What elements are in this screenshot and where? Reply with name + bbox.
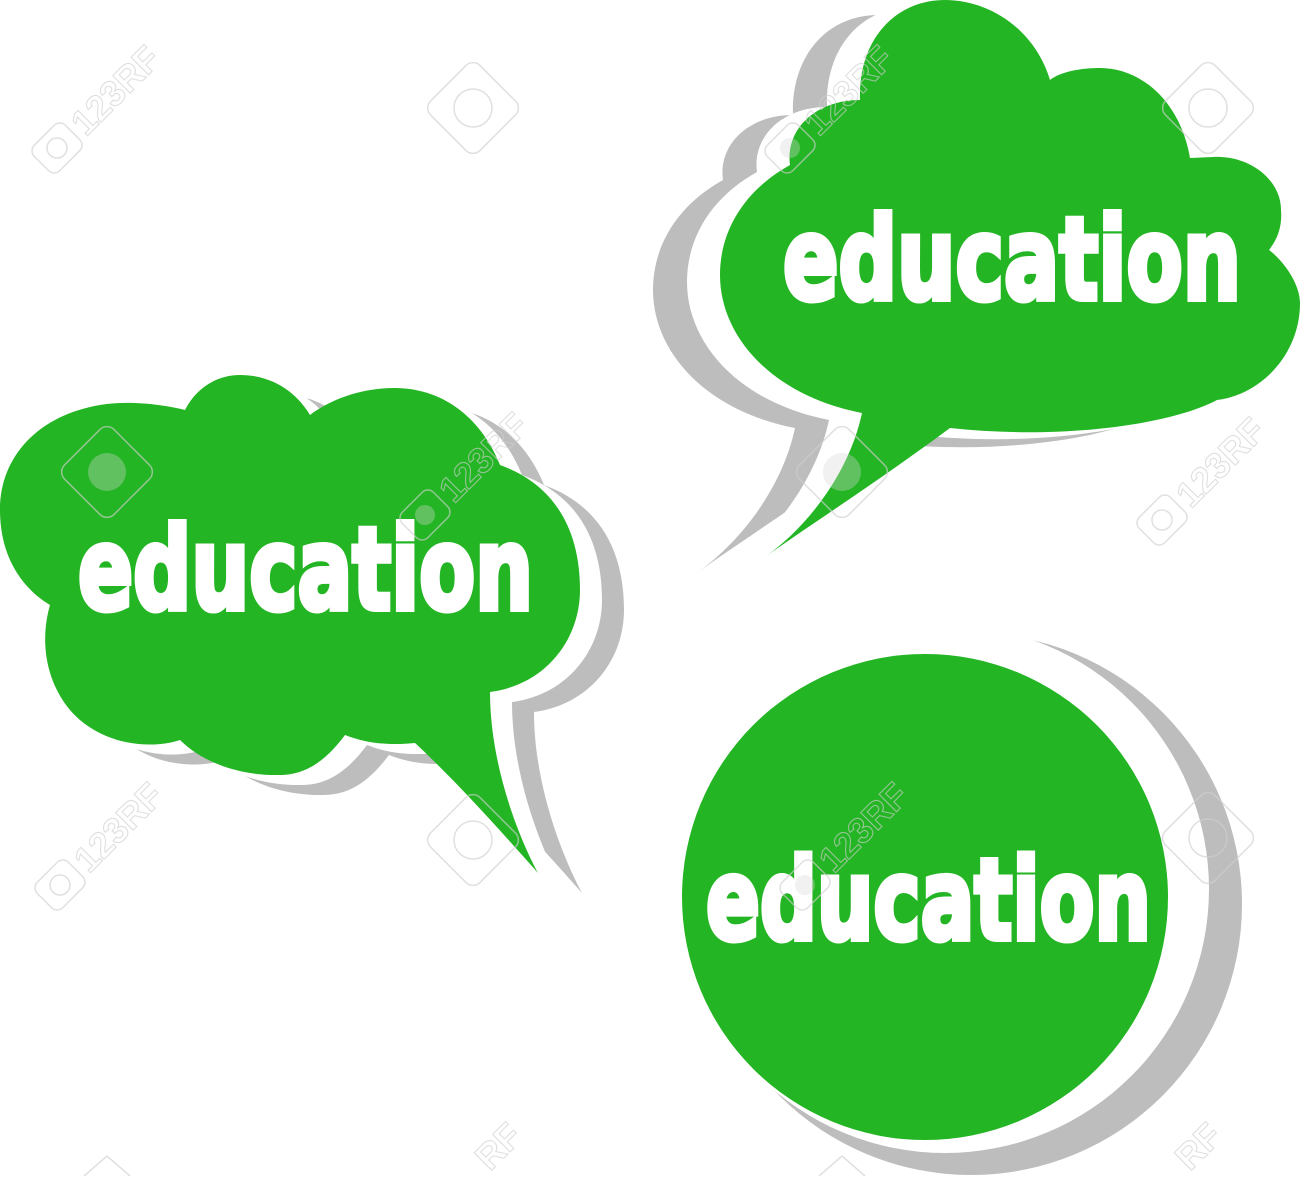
green circle (682, 654, 1168, 1140)
sticker: round badge (681, 625, 1242, 1175)
word: education: education (78, 503, 533, 636)
sticker: left cloud speech bubble (0, 375, 624, 893)
gray cloud shadow (44, 395, 624, 893)
watermark stamps: 123RF (796, 38, 901, 143)
watermark stamps: 123RF (63, 38, 168, 143)
watermark stamps: RF (1167, 1115, 1230, 1178)
watermark stamps: 123RF (1168, 410, 1273, 515)
sticker: top right cloud speech bubble (653, 0, 1300, 572)
gray cloud shadow (653, 15, 1233, 572)
watermark stamps: RF (467, 1115, 530, 1178)
watermark stamps: 123RF (811, 775, 916, 880)
watermark stamps: 123RF (431, 405, 536, 510)
white cloud outline layer (22, 385, 602, 883)
white circle layer (681, 625, 1209, 1153)
gray circle shadow (700, 633, 1242, 1175)
green cloud bubble (0, 375, 580, 873)
watermark stamps: 123RF (66, 775, 171, 880)
white cloud outline layer (687, 7, 1267, 564)
green cloud bubble (720, 0, 1300, 557)
